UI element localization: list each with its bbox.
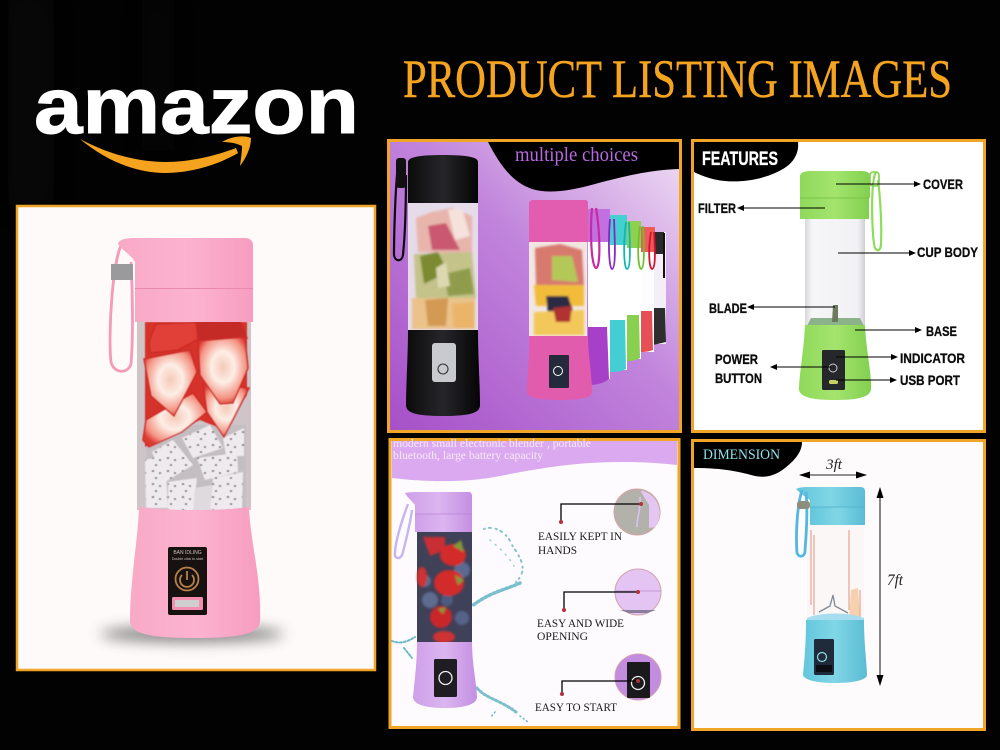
features heading: FEATURES: [702, 149, 778, 170]
water splash: [392, 528, 528, 722]
black blender: [394, 155, 480, 416]
blue base: [803, 620, 867, 683]
detail circle: power button: [615, 654, 661, 700]
panel: dimension: [692, 440, 984, 730]
control panel: [168, 547, 207, 615]
feature labels: CUP BODY: [917, 244, 979, 260]
callout labels: HANDS: [538, 545, 577, 557]
blue glass: [807, 525, 864, 621]
strap clip: [111, 264, 133, 280]
panel small text: BAN IDLING: [173, 550, 202, 556]
callout labels: EASY AND WIDE: [537, 618, 624, 630]
dimension tab: [694, 442, 802, 477]
blue collar: [810, 507, 865, 525]
motor base: [130, 507, 260, 638]
callout labels: EASILY KEPT IN: [538, 531, 623, 543]
header description: bluetooth, large battery capacity: [393, 450, 543, 462]
lid: [118, 238, 253, 288]
green lid: [800, 171, 870, 198]
carry strap: [110, 241, 132, 371]
feature arrows: [738, 184, 921, 380]
feature labels: FILTER: [698, 200, 736, 216]
blue control panel: [814, 639, 834, 675]
pink blender: [527, 200, 599, 400]
panel: easy use callouts: [390, 438, 679, 728]
red variant: [640, 227, 655, 352]
green collar: [800, 198, 869, 219]
lilac collar: [415, 514, 472, 532]
header description: modern small electronic blender , portable: [393, 438, 591, 450]
dragon fruit pieces: [145, 425, 246, 512]
detail circle: opening: [615, 569, 661, 615]
silver button: [432, 343, 456, 382]
feature labels: BUTTON: [715, 370, 762, 386]
green control panel: [822, 350, 845, 390]
feature labels: POWER: [715, 351, 758, 367]
teal variant: [609, 215, 630, 372]
blender shadow: [100, 626, 284, 642]
callout red dots: [559, 502, 643, 696]
logo wordmark: amazon: [34, 61, 359, 150]
callout labels: OPENING: [537, 631, 588, 643]
green strap: [872, 172, 881, 250]
logo smile arrow: [80, 136, 251, 173]
detail circle: strap: [614, 489, 660, 535]
callout connector lines: [561, 504, 641, 694]
dimension heading: DIMENSION: [703, 447, 780, 463]
width arrow: [800, 474, 866, 476]
panel: multiple choices: [388, 140, 680, 432]
callout labels: [535, 531, 624, 714]
lilac control panel: [434, 659, 457, 697]
amazon logo: [34, 61, 359, 173]
glass cup: [137, 318, 251, 510]
green base: [799, 325, 871, 400]
blue strap: [797, 490, 807, 556]
pink lid: [529, 200, 588, 242]
battery port: [172, 597, 203, 610]
panel hint text: Double click to start: [172, 557, 203, 561]
feature labels: COVER: [923, 176, 963, 192]
fruit glass: [417, 532, 472, 643]
lilac base: [413, 642, 477, 708]
green blender: [799, 171, 881, 400]
lilac strap: [395, 504, 412, 558]
purple variant: [588, 209, 615, 385]
pink base: [527, 336, 592, 400]
height arrow: [879, 488, 881, 685]
height label: 7ft: [887, 572, 904, 589]
feature labels: USB PORT: [900, 372, 960, 388]
header description: [393, 438, 591, 462]
power icon: [176, 568, 198, 590]
multiple choices label: multiple choices: [515, 144, 638, 166]
green variant: [626, 221, 644, 361]
lilac blender: [395, 492, 477, 708]
feature labels: BLADE: [709, 300, 747, 316]
panel: main product photo: [17, 206, 375, 670]
callout labels: EASY TO START: [535, 702, 617, 714]
feature labels: [698, 176, 979, 388]
black wave header: [488, 142, 679, 191]
glass and fruit: [408, 203, 478, 330]
black variant: [653, 232, 666, 345]
width label: 3ft: [825, 457, 843, 473]
colour range row: [527, 200, 666, 400]
green glass: [805, 218, 865, 326]
lid collar: [135, 289, 253, 322]
pink control panel: [549, 355, 569, 388]
feature labels: INDICATOR: [900, 350, 965, 366]
base: [406, 330, 480, 416]
pink blender: [110, 238, 260, 638]
features tab: [694, 142, 798, 181]
lilac lid: [405, 492, 472, 514]
strap: [394, 165, 406, 260]
fruit filling: [143, 321, 249, 512]
panel: features: [692, 140, 984, 432]
blue strap clip: [797, 501, 810, 509]
strawberries: [143, 321, 249, 447]
lilac wave header: [392, 441, 677, 481]
lid: [408, 155, 478, 203]
blue blender: [796, 487, 867, 683]
feature labels: BASE: [926, 323, 957, 339]
pink strap: [591, 208, 599, 268]
blue lid: [796, 487, 865, 507]
